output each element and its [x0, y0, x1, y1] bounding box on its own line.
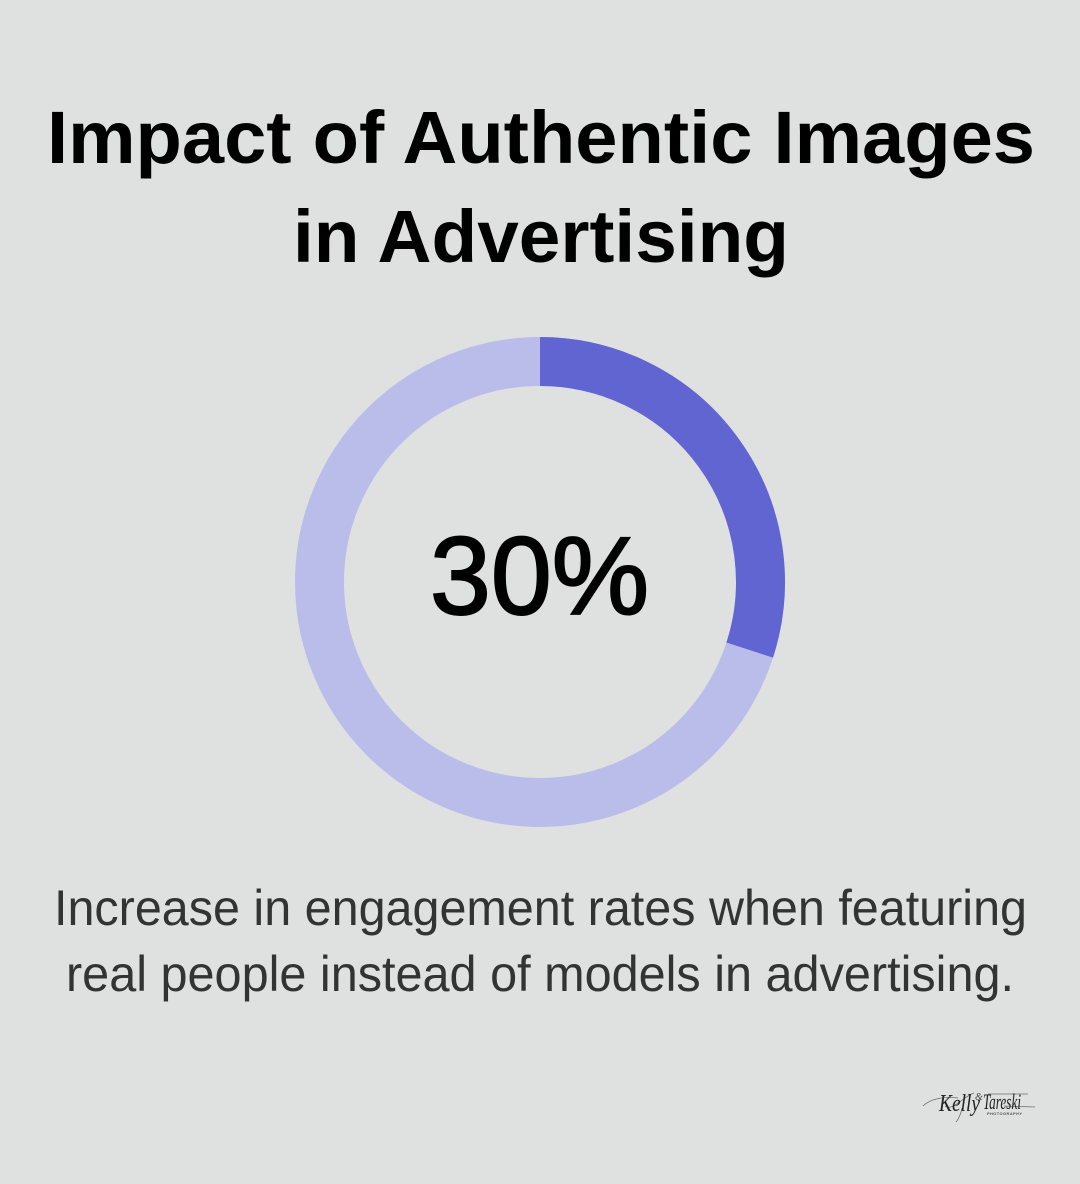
- center value: 30%: [430, 515, 649, 638]
- title: Impact of Authentic Images: [47, 96, 1035, 179]
- signature logo: &: [975, 1092, 983, 1103]
- title: [47, 96, 1035, 278]
- description text: Increase in engagement rates when featuring: [54, 880, 1027, 936]
- signature logo: Tareski: [983, 1089, 1021, 1114]
- donut chart: 30%: [320, 362, 760, 802]
- signature logo: [923, 1089, 1035, 1122]
- signature logo: Kelly: [938, 1091, 980, 1117]
- signature logo: PHOTOGRAPHY: [987, 1111, 1022, 1116]
- title: in Advertising: [293, 195, 789, 278]
- description text: [54, 880, 1027, 1002]
- description text: real people instead of models in advertising.: [66, 946, 1014, 1002]
